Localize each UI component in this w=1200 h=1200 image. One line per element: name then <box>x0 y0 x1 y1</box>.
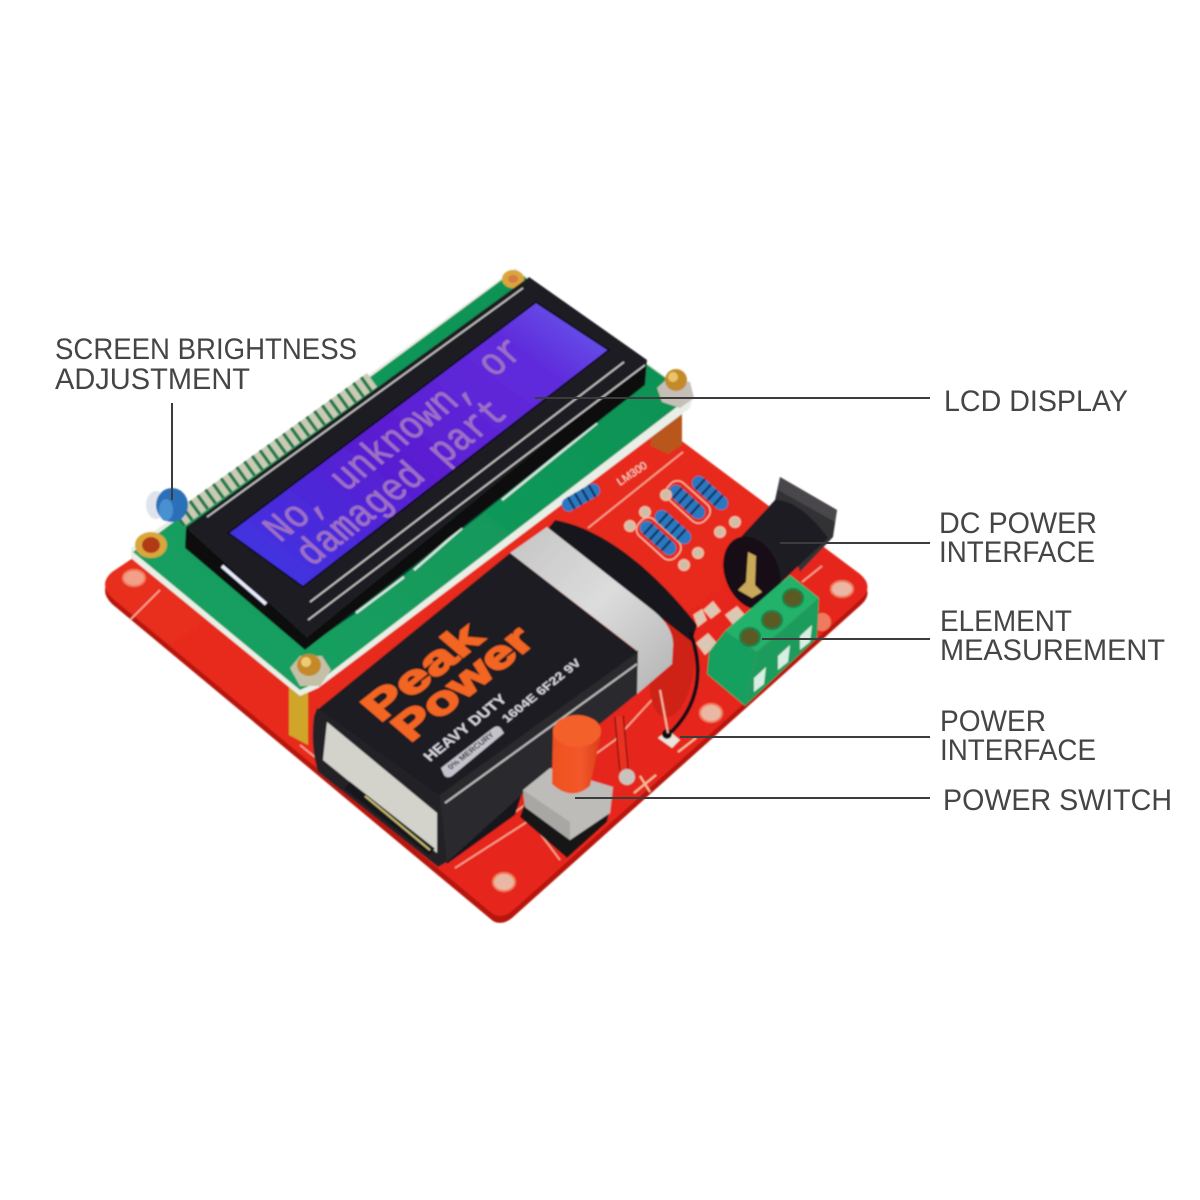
mercury badge: 0% MERCURY <box>446 730 497 771</box>
jack barrel <box>738 500 828 590</box>
LCD frame side <box>185 360 647 650</box>
brass mounting ring, left <box>135 532 167 558</box>
board mounting holes <box>123 570 853 891</box>
battery silver end <box>323 722 437 853</box>
leader line: power switch <box>575 797 930 799</box>
power switch <box>520 715 613 858</box>
label: element measurement <box>940 605 1165 667</box>
dark shadow band under LCD <box>305 378 645 648</box>
label: LCD display: LCD DISPLAY <box>944 385 1128 418</box>
label: power interface: POWER <box>940 705 1046 738</box>
resistors <box>559 473 740 570</box>
battery brand text: Power <box>381 618 543 749</box>
LCD green carrier board <box>131 268 693 696</box>
battery silver cap <box>510 527 673 694</box>
front standoff <box>289 680 308 745</box>
battery duty text <box>420 656 584 765</box>
battery duty text: HEAVY DUTY <box>420 692 511 765</box>
left nut and bolt <box>290 654 331 686</box>
red wire <box>619 716 635 785</box>
small solder pads <box>694 602 745 654</box>
shadow under battery <box>440 693 637 864</box>
leader line: DC power <box>780 542 930 544</box>
screen message: damaged part <box>286 391 519 576</box>
label: screen brightness adjustment <box>55 333 357 396</box>
label: DC power interface: INTERFACE <box>939 536 1095 569</box>
orange switch button <box>552 715 601 794</box>
red circuit board <box>105 380 868 923</box>
screw holes <box>740 589 803 646</box>
chip label: LM300 <box>615 460 650 488</box>
leader line: brightness <box>171 403 173 500</box>
leader line: power interface <box>680 736 930 738</box>
battery strap and wire <box>547 520 698 748</box>
green screw terminal <box>707 575 819 706</box>
plus mark <box>634 775 656 793</box>
LCD module <box>185 277 647 650</box>
label: DC power interface: DC POWER <box>939 507 1097 540</box>
label: element measurement: MEASUREMENT <box>940 634 1165 667</box>
label: power interface <box>940 705 1096 767</box>
label: power interface: INTERFACE <box>940 734 1096 767</box>
pale light reflections <box>356 423 597 613</box>
9V battery <box>313 527 673 867</box>
mercury badge <box>441 726 504 777</box>
jack rear block <box>775 477 837 572</box>
white edge reflection <box>222 566 266 604</box>
LCD black frame <box>186 277 647 637</box>
label: DC power interface <box>939 507 1097 569</box>
battery brand text: Peak <box>351 614 493 729</box>
blue LCD screen <box>228 302 609 587</box>
screen message: No, unknown, or <box>254 329 536 552</box>
leader line: element measurement <box>762 638 930 640</box>
terminal slots <box>754 625 812 692</box>
DC power jack <box>713 477 837 618</box>
battery label top face <box>317 553 638 797</box>
battery brand text <box>351 614 543 749</box>
label: screen brightness adjustment: SCREEN BRIGHTNESS <box>55 333 357 366</box>
battery front rim <box>313 708 447 867</box>
right nut and bolt <box>657 369 694 408</box>
device photo illustration <box>105 268 868 923</box>
label: screen brightness adjustment: ADJUSTMENT <box>55 363 250 396</box>
brass mounting ring, top <box>502 270 524 288</box>
label: element measurement: ELEMENT <box>940 605 1072 638</box>
dark red capacitor pad <box>643 615 701 721</box>
silkscreen lines <box>130 452 822 868</box>
brightness potentiometer <box>146 488 188 522</box>
pin header strip <box>178 380 372 520</box>
rear standoff <box>651 395 682 454</box>
battery lower side <box>435 650 638 862</box>
leader line: LCD display <box>535 397 930 399</box>
frame highlight lines <box>207 288 645 620</box>
minus mark <box>678 738 696 752</box>
battery end slot <box>347 785 432 852</box>
label: power switch: POWER SWITCH <box>943 784 1172 817</box>
battery duty text: 1604E 6F22 9V <box>499 656 584 725</box>
